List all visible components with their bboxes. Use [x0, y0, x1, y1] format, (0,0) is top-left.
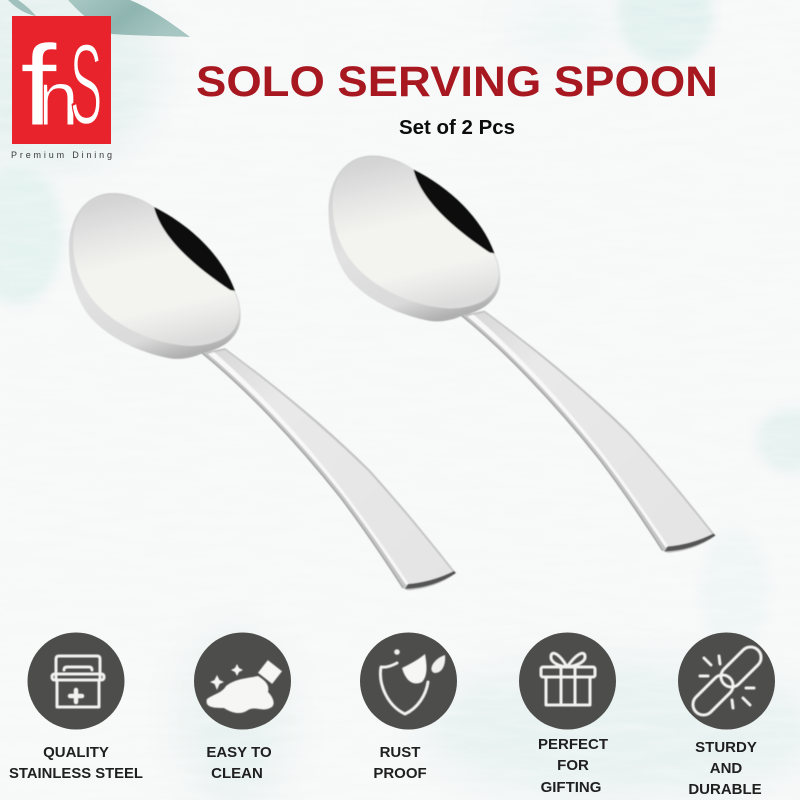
- logo: [11, 16, 112, 160]
- label: CLEAN: [211, 765, 263, 782]
- label: [373, 744, 427, 782]
- logo: red square: [12, 16, 111, 144]
- feature: easy to clean: [194, 632, 291, 782]
- logo: fnS letters: n: [36, 56, 79, 142]
- feature: quality stainless steel: [9, 632, 143, 782]
- icon: gift box: [519, 632, 616, 730]
- label: EASY TO: [206, 744, 272, 761]
- label: GIFTING: [541, 779, 601, 796]
- logo: fnS letters: f: [20, 22, 57, 150]
- label: PERFECT: [538, 736, 608, 753]
- icon: shield with drops: [360, 632, 457, 730]
- logo: fnS letters: [20, 20, 102, 150]
- title: SOLO SERVING SPOON: [196, 58, 718, 106]
- subtitle: Set of 2 Pcs: [399, 117, 515, 139]
- label: STURDY: [695, 739, 757, 756]
- spoon: left: [69, 193, 456, 590]
- spoon: right: [328, 156, 716, 553]
- icon: chain links: [678, 632, 775, 730]
- logo: fnS letters: S: [70, 20, 102, 149]
- label: QUALITY: [43, 744, 109, 761]
- feature: sturdy and durable: [678, 632, 775, 798]
- label: [538, 736, 608, 796]
- label: [206, 744, 272, 782]
- icon: spill and sparkles: [194, 632, 291, 730]
- label: RUST: [380, 744, 420, 761]
- label: AND: [710, 760, 742, 777]
- label: DURABLE: [688, 781, 762, 798]
- label: STAINLESS STEEL: [9, 765, 143, 782]
- label: [9, 744, 143, 782]
- label: [688, 739, 762, 798]
- feature: perfect for gifting: [519, 632, 616, 796]
- label: FOR: [557, 757, 589, 774]
- logo: tagline: Premium Dining: [11, 150, 112, 160]
- label: PROOF: [373, 765, 427, 782]
- icon: toolbox: [28, 632, 124, 730]
- decorative leaves: [8, 0, 190, 37]
- feature: rust proof: [360, 632, 457, 782]
